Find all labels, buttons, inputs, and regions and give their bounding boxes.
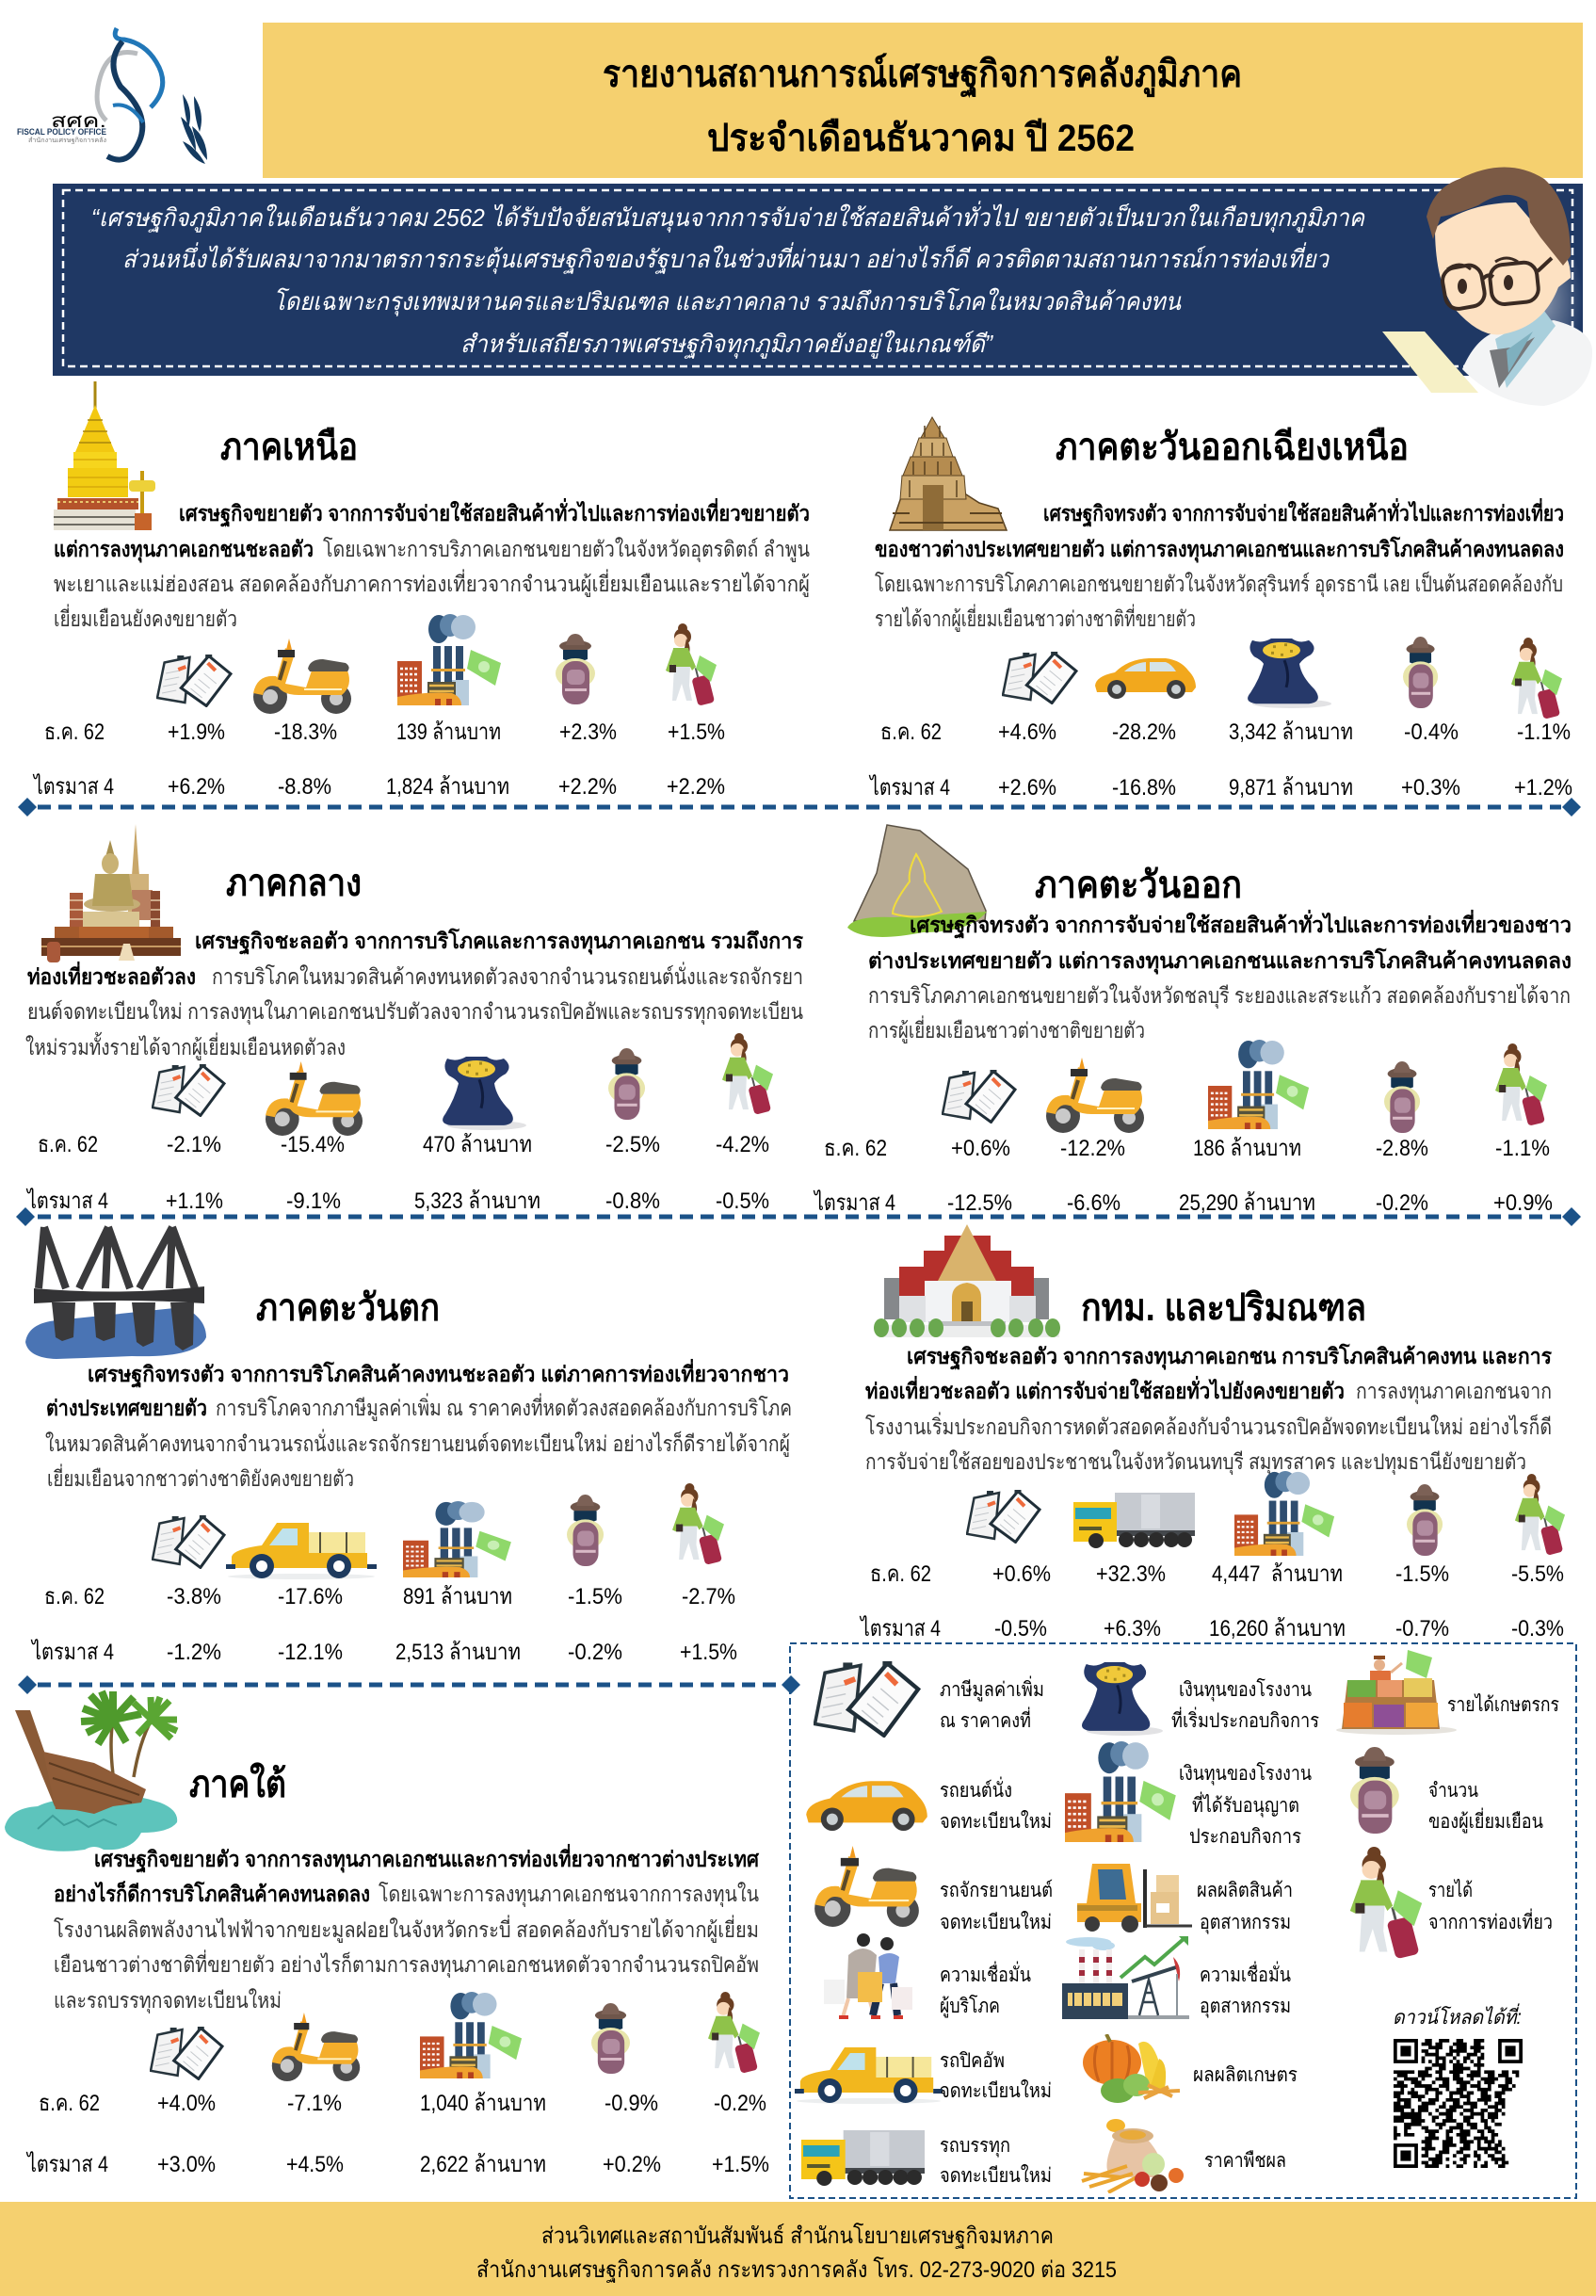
- icon: money bag: [1248, 639, 1331, 708]
- label: VAT: ณ ราคาคงที่: [940, 1706, 1031, 1732]
- data rows: [868, 720, 1572, 800]
- footer banner: [0, 2202, 1596, 2296]
- body text: การบริโภคในหมวดสินค้าคงทนหดตัวลงจากจำนวนรถยนต์นั่งและรถจักรยา: [212, 962, 803, 989]
- footer line 2: สำนักงานเศรษฐกิจการคลัง กระทรวงการคลัง โทร. 02-273-9020 ต่อ 3215: [476, 2256, 1117, 2283]
- data rows: -1.5%: [568, 1584, 622, 1609]
- label: starting factory capital: ที่เริ่มประกอบกิจการ: [1171, 1706, 1319, 1732]
- icon: truck: [801, 2130, 925, 2186]
- illustration: golden stupa: [54, 381, 155, 530]
- icon: traveler: [722, 1033, 773, 1115]
- label: industrial output: [1197, 1880, 1293, 1934]
- icon: motorcycle: [272, 2013, 360, 2081]
- data rows: -0.9%: [605, 2091, 658, 2116]
- body text: เยือนชาวต่างชาติที่ขยายตัว อย่างไรก็ตามการลงทุนภาคเอกชนหดตัวจากจำนวนรถปิคอัพ: [54, 1949, 759, 1978]
- data rows: ไตรมาส 4: [25, 1188, 108, 1214]
- data rows: 1,040 ล้านบาท: [420, 2091, 546, 2116]
- icon: traveler: [672, 1483, 724, 1565]
- body text: เศรษฐกิจชะลอตัว จากการลงทุนภาคเอกชน การบริโภคสินค้าคงทน และการ: [907, 1343, 1553, 1370]
- quote text: โดยเฉพาะกรุงเทพมหานครและปริมณฑล และภาคกลาง รวมถึงการบริโภคในหมวดสินค้าคงทน: [273, 287, 1182, 316]
- icon: backpacker: [1407, 1484, 1443, 1556]
- title banner: [263, 23, 1583, 178]
- quote text: [91, 201, 1366, 359]
- body text: เศรษฐกิจขยายตัว จากการลงทุนภาคเอกชนและการท่องเที่ยวจากชาวต่างประเทศ: [94, 1843, 759, 1873]
- data rows: +2.2%: [558, 774, 617, 800]
- data rows: +6.2%: [168, 774, 225, 800]
- icon: motorcycle: [253, 639, 351, 714]
- label: farm income: รายได้เกษตรกร: [1447, 1693, 1559, 1716]
- panel: West: [25, 1227, 792, 1665]
- icon: car: [1095, 658, 1196, 699]
- data rows: +0.6%: [951, 1136, 1010, 1161]
- data rows: +3.0%: [157, 2152, 216, 2177]
- label: tourism income: จากการท่องเที่ยว: [1428, 1908, 1553, 1933]
- data rows: ธ.ค. 62: [870, 1561, 931, 1587]
- data rows: -18.3%: [274, 720, 337, 745]
- label: industrial confidence: อุตสาหกรรม: [1200, 1996, 1291, 2018]
- data rows: +1.5%: [712, 2152, 769, 2177]
- heading: ภาคกลาง: [226, 863, 362, 904]
- icon: traveler: [1511, 638, 1562, 720]
- data rows: [32, 720, 725, 800]
- data rows: 139 ล้านบาท: [396, 720, 501, 745]
- data rows: -0.2%: [714, 2091, 766, 2116]
- data rows: +2.3%: [559, 720, 617, 745]
- quote text: “เศรษฐกิจภูมิภาคในเดือนธันวาคม 2562 ได้รับปัจจัยสนับสนุนจากการจับจ่ายใช้สอยสินค้าทั่วไป ขยายตัวเป็นบวกในเกือบทุกภูมิภาค: [91, 201, 1366, 233]
- label: new pickups: [940, 2050, 1052, 2102]
- label: new motorcycles: [940, 1879, 1053, 1933]
- icon: farm produce: [1083, 2034, 1180, 2103]
- icon: factory: [1208, 1040, 1309, 1129]
- icon: VAT forms: [1003, 652, 1076, 703]
- icon: VAT forms: [153, 1515, 224, 1567]
- data rows: -0.2%: [568, 1640, 622, 1665]
- data rows: +4.6%: [998, 720, 1056, 745]
- heading: ภาคตะวันตก: [256, 1287, 440, 1329]
- body text: [868, 909, 1572, 1043]
- data rows: -2.8%: [1376, 1136, 1428, 1161]
- label: new pickups: จดทะเบียนใหม่: [940, 2079, 1052, 2102]
- body text: [54, 497, 810, 631]
- icon: money bag: [443, 1057, 526, 1130]
- panel: summary quote: [53, 184, 1583, 376]
- label: farm output: ผลผลิตเกษตร: [1193, 2064, 1298, 2086]
- data rows: -9.1%: [286, 1188, 341, 1214]
- icon: industry and oil pump: [1062, 1936, 1189, 2019]
- data rows: ธ.ค. 62: [38, 1132, 98, 1157]
- label: new trucks: รถบรรทุก: [940, 2135, 1010, 2158]
- data rows: +0.6%: [992, 1561, 1051, 1587]
- heading: ภาคตะวันออก: [1035, 865, 1242, 906]
- data rows: [25, 2091, 769, 2177]
- data rows: -4.2%: [716, 1132, 769, 1157]
- label: new cars: จดทะเบียนใหม่: [940, 1810, 1052, 1833]
- data rows: ธ.ค. 62: [44, 1584, 105, 1609]
- data rows: -2.5%: [605, 1132, 660, 1157]
- label: consumer confidence: [940, 1961, 1031, 2018]
- label: consumer confidence: ความเชื่อมั่น: [940, 1961, 1031, 1986]
- label: new trucks: จดทะเบียนใหม่: [940, 2164, 1052, 2187]
- panel: Central: [25, 824, 804, 1214]
- data rows: -1.2%: [167, 1640, 221, 1665]
- data rows: +1.2%: [1514, 775, 1572, 800]
- body text: พะเยาและแม่ฮ่องสอน สอดคล้องกับภาคการท่องเที่ยวจากจำนวนผู้เยี่ยมเยือนและรายได้จากผู้: [54, 569, 810, 597]
- title line 1: รายงานสถานการณ์เศรษฐกิจการคลังภูมิภาค: [603, 53, 1242, 99]
- data rows: +1.5%: [668, 720, 725, 745]
- data rows: -3.8%: [167, 1584, 221, 1609]
- body text: [54, 1843, 759, 2013]
- data rows: 891 ล้านบาท: [403, 1584, 512, 1609]
- label: starting factory capital: [1171, 1678, 1319, 1732]
- icon: backpacker: [591, 2003, 630, 2074]
- data rows: +2.6%: [998, 775, 1056, 800]
- footer line 1: ส่วนวิเทศและสถาบันสัมพันธ์ สำนักนโยบายเศรษฐกิจมหภาค: [541, 2223, 1054, 2249]
- quote text: ส่วนหนึ่งได้รับผลมาจากมาตรการกระตุ้นเศรษฐกิจของรัฐบาลในช่วงที่ผ่านมา อย่างไรก็ดี ควรติดตามสถานการณ์การท่องเที่ยว: [122, 242, 1330, 274]
- data rows: -12.2%: [1060, 1136, 1125, 1161]
- label: licensed factory capital: [1179, 1762, 1312, 1848]
- data rows: ไตรมาส 4: [32, 773, 114, 800]
- body text: และรถบรรทุกจดทะเบียนใหม่: [54, 1988, 282, 2013]
- panel: legend: [782, 1643, 1576, 2198]
- data rows: +4.5%: [286, 2152, 344, 2177]
- data rows: +32.3%: [1096, 1561, 1166, 1587]
- data rows: ธ.ค. 62: [824, 1136, 887, 1161]
- icon: shoppers: [824, 1933, 912, 2017]
- icon: factory: [1065, 1741, 1176, 1842]
- body text: โดยเฉพาะการบริภาคเอกชนขยายตัวในจังหวัดอุตรดิตถ์ ลำพูน: [323, 537, 810, 562]
- data rows: -0.8%: [605, 1188, 660, 1214]
- data rows: 470 ล้านบาท: [423, 1132, 532, 1157]
- icon: backpacker: [1403, 637, 1438, 708]
- data rows: +0.9%: [1493, 1190, 1553, 1216]
- label: crop prices: ราคาพืชผล: [1204, 2150, 1286, 2172]
- icon: factory: [1234, 1471, 1334, 1556]
- data rows: -8.8%: [278, 774, 331, 800]
- data rows: ธ.ค. 62: [39, 2091, 100, 2116]
- label: number of visitors: จำนวน: [1428, 1780, 1478, 1802]
- body text: รายได้จากผู้เยี่ยมเยือนชาวต่างชาติที่ขยายตัว: [875, 604, 1196, 632]
- icon: traveler: [1515, 1474, 1565, 1556]
- heading: ภาคใต้: [189, 1762, 286, 1805]
- icon: traveler: [1495, 1043, 1547, 1126]
- body text: โรงงานผลิตพลังงานไฟฟ้าจากขยะมูลฝอยในจังหวัดกระบี่ สอดคล้องกับรายได้จากผู้เยี่ยม: [54, 1915, 759, 1943]
- icon: motorcycle: [1046, 1058, 1144, 1133]
- label: new cars: รถยนต์นั่ง: [940, 1776, 1012, 1802]
- panel: Northeast: [868, 417, 1572, 800]
- data rows: -12.1%: [278, 1640, 343, 1665]
- icon: backpacker: [1350, 1747, 1399, 1834]
- body text: อย่างไรก็ดีการบริโภคสินค้าคงทนลดลง: [54, 1880, 370, 1906]
- icon: VAT forms: [814, 1661, 918, 1736]
- icon: backpacker: [608, 1048, 645, 1120]
- label: industrial confidence: ความเชื่อมั่น: [1200, 1961, 1291, 1986]
- data rows: 3,342 ล้านบาท: [1229, 720, 1353, 745]
- body text: ท่องเที่ยวชะลอตัวลง: [27, 961, 196, 989]
- illustration: stone monument: [890, 417, 1007, 530]
- label: consumer confidence: ผู้บริโภค: [940, 1995, 1000, 2018]
- body text: แต่การลงทุนภาคเอกชนชะลอตัว: [54, 537, 314, 563]
- label: new trucks: [940, 2135, 1052, 2187]
- body text: ต่างประเทศขยายตัว: [46, 1396, 207, 1420]
- data rows: -0.5%: [994, 1616, 1047, 1641]
- icon: truck: [1073, 1493, 1195, 1548]
- body text: [25, 928, 804, 1060]
- heading: ภาคเหนือ: [220, 427, 358, 468]
- data rows: +0.2%: [603, 2152, 661, 2177]
- body text: [865, 1343, 1553, 1475]
- data rows: ไตรมาส 4: [25, 2151, 108, 2177]
- data rows: +2.2%: [667, 774, 725, 800]
- data rows: 9,871 ล้านบาท: [1229, 775, 1353, 800]
- data rows: +6.3%: [1104, 1616, 1161, 1641]
- data rows: -0.7%: [1395, 1616, 1449, 1641]
- data rows: -1.1%: [1495, 1136, 1550, 1161]
- icon: motorcycle: [814, 1846, 919, 1927]
- data rows: [30, 1584, 737, 1665]
- data rows: 4,447 ล้านบาท: [1212, 1561, 1343, 1587]
- label: number of visitors: [1428, 1780, 1543, 1834]
- data rows: ธ.ค. 62: [44, 720, 105, 745]
- data rows: +4.0%: [157, 2091, 216, 2116]
- data rows: -28.2%: [1112, 720, 1176, 745]
- body text: ใหม่รวมทั้งรายได้จากผู้เยี่ยมเยือนหดตัวลง: [25, 1032, 346, 1060]
- label: licensed factory capital: เงินทุนของโรงงาน: [1179, 1762, 1312, 1786]
- icon: forklift: [1077, 1864, 1192, 1932]
- data rows: -12.5%: [947, 1190, 1012, 1216]
- icon: factory: [420, 1992, 522, 2078]
- QR code: [1394, 2039, 1523, 2168]
- data rows: -1.5%: [1395, 1561, 1449, 1587]
- icon: money bag: [1082, 1662, 1163, 1736]
- icon: VAT forms: [151, 2027, 222, 2078]
- data rows: [859, 1561, 1564, 1641]
- icon: grain sack and crops: [1082, 2119, 1184, 2192]
- label: VAT: [940, 1675, 1044, 1732]
- data rows: 2,622 ล้านบาท: [420, 2152, 546, 2177]
- panel: Bangkok and vicinity: [859, 1224, 1565, 1641]
- icon: traveler: [1350, 1847, 1422, 1959]
- data rows: 25,290 ล้านบาท: [1179, 1190, 1315, 1216]
- label: new motorcycles: จดทะเบียนใหม่: [940, 1911, 1052, 1933]
- data rows: -0.2%: [1376, 1190, 1428, 1216]
- data rows: [25, 1132, 769, 1214]
- label: industrial output: ผลผลิตสินค้า: [1197, 1880, 1293, 1901]
- icon: backpacker: [556, 634, 595, 704]
- data rows: +1.5%: [680, 1640, 737, 1665]
- data rows: ไตรมาส 4: [813, 1189, 895, 1216]
- heading: กทม. และปริมณฑล: [1081, 1287, 1366, 1329]
- icon: VAT forms: [153, 1064, 224, 1115]
- illustration: rock with Buddha outline: [847, 825, 987, 937]
- data rows: -2.7%: [682, 1584, 735, 1609]
- label: tourism income: [1428, 1879, 1553, 1933]
- label: industrial confidence: [1200, 1961, 1291, 2018]
- data rows: 16,260 ล้านบาท: [1209, 1616, 1346, 1641]
- data rows: -5.5%: [1511, 1561, 1564, 1587]
- body text: ยนต์จดทะเบียนใหม่ การลงทุนในภาคเอกชนปรับตัวลงจากจำนวนรถปิคอัพและรถบรรทุกจดทะเบียน: [27, 999, 803, 1025]
- body text: ต่างประเทศขยายตัว แต่การลงทุนภาคเอกชนและการบริโภคสินค้าคงทนลดลง: [868, 947, 1572, 975]
- data rows: -2.1%: [167, 1132, 221, 1157]
- data rows: 2,513 ล้านบาท: [395, 1640, 521, 1665]
- label: number of visitors: ของผู้เยี่ยมเยือน: [1428, 1807, 1543, 1834]
- data rows: -0.5%: [716, 1188, 769, 1214]
- label: industrial output: อุตสาหกรรม: [1200, 1912, 1291, 1934]
- logo: fiscal policy office: สศค.: [51, 111, 106, 132]
- icon: factory: [403, 1501, 511, 1577]
- label: VAT: ภาษีมูลค่าเพิ่ม: [940, 1675, 1044, 1702]
- illustration: wooden bridge: [25, 1227, 206, 1359]
- data rows: ไตรมาส 4: [859, 1615, 941, 1641]
- icon: VAT forms: [157, 655, 231, 706]
- body text: การผู้เยี่ยมเยือนชาวต่างชาติขยายตัว: [868, 1015, 1145, 1043]
- quote text: สำหรับเสถียรภาพเศรษฐกิจทุกภูมิภาคยังอยู่ในเกณฑ์ดี”: [460, 330, 993, 359]
- panel: East: [813, 825, 1572, 1216]
- body text: เศรษฐกิจทรงตัว จากการจับจ่ายใช้สอยสินค้าทั่วไปและการท่องเที่ยวของชาว: [910, 909, 1572, 939]
- icon: traveler: [708, 1992, 760, 2074]
- label: download here: ดาวน์โหลดได้ที่:: [1393, 2003, 1522, 2029]
- icon: pickup truck: [226, 1523, 377, 1579]
- data rows: ไตรมาส 4: [868, 774, 950, 800]
- data rows: 1,824 ล้านบาท: [386, 774, 509, 800]
- body text: เยี่ยมเยือนยังคงขยายตัว: [54, 604, 237, 631]
- data rows: -17.6%: [278, 1584, 343, 1609]
- data rows: -1.1%: [1517, 720, 1571, 745]
- label: new cars: [940, 1776, 1052, 1833]
- data rows: -16.8%: [1112, 775, 1176, 800]
- data rows: -6.6%: [1067, 1190, 1120, 1216]
- icon: traveler: [666, 623, 717, 706]
- label: starting factory capital: เงินทุนของโรงงาน: [1179, 1678, 1312, 1702]
- illustration: longtail boat and palms: [5, 1691, 177, 1851]
- label: licensed factory capital: ที่ได้รับอนุญาต: [1192, 1791, 1299, 1818]
- illustration: marble temple: [874, 1224, 1060, 1337]
- body text: โดยเฉพาะการลงทุนภาคเอกชนจากการลงทุนใน: [379, 1882, 759, 1907]
- body text: เศรษฐกิจขยายตัว จากการจับจ่ายใช้สอยสินค้าทั่วไปและการท่องเที่ยวขยายตัว: [179, 497, 810, 527]
- logo: fiscal policy office: [17, 28, 207, 164]
- data rows: [813, 1136, 1553, 1216]
- illustration: doctor reading: [1382, 168, 1592, 406]
- data rows: -0.4%: [1404, 720, 1459, 745]
- data rows: ธ.ค. 62: [880, 720, 942, 745]
- icon: factory: [397, 614, 501, 705]
- icon: farmer market stall: [1336, 1650, 1457, 1735]
- icon: pickup truck: [795, 2047, 943, 2104]
- data rows: -0.3%: [1511, 1616, 1564, 1641]
- body text: [45, 1358, 792, 1491]
- icon: motorcycle: [266, 1061, 363, 1136]
- data rows: -15.4%: [281, 1132, 345, 1157]
- body text: การบริโภคจากภาษีมูลค่าเพิ่ม ณ ราคาคงที่หดตัวลงสอดคล้องกับการบริโภค: [216, 1393, 792, 1421]
- body text: เศรษฐกิจชะลอตัว จากการบริโภคและการลงทุนภาคเอกชน รวมถึงการ: [195, 928, 804, 955]
- data rows: ไตรมาส 4: [30, 1639, 114, 1665]
- label: tourism income: รายได้: [1428, 1879, 1473, 1901]
- icon: car: [806, 1781, 927, 1831]
- panel: South: [5, 1691, 769, 2177]
- label: new pickups: รถปิคอัพ: [940, 2050, 1005, 2072]
- logo: fiscal policy office: FISCAL POLICY OFFICE: [17, 127, 106, 137]
- body text: เยี่ยมเยือนจากชาวต่างชาติยังคงขยายตัว: [47, 1463, 354, 1491]
- illustration: seated Buddha ruins: [41, 824, 181, 962]
- data rows: +1.1%: [166, 1188, 223, 1214]
- icon: backpacker: [1384, 1061, 1420, 1133]
- icon: VAT forms: [967, 1490, 1040, 1542]
- label: licensed factory capital: ประกอบกิจการ: [1189, 1826, 1301, 1848]
- body text: การลงทุนภาคเอกชนจาก: [1356, 1379, 1552, 1404]
- logo: fiscal policy office: สำนักงานเศรษฐกิจการคลัง: [28, 137, 106, 144]
- data rows: 186 ล้านบาท: [1193, 1136, 1301, 1161]
- icon: VAT forms: [943, 1070, 1015, 1122]
- body text: ท่องเที่ยวชะลอตัว แต่การจับจ่ายใช้สอยทั่วไปยังคงขยายตัว: [865, 1375, 1345, 1403]
- data rows: 5,323 ล้านบาท: [414, 1188, 540, 1214]
- icon: backpacker: [567, 1495, 604, 1566]
- body text: ในหมวดสินค้าคงทนจากจำนวนรถนั่งและรถจักรยานยนต์จดทะเบียนใหม่ อย่างไรก็ดีรายได้จากผู้: [45, 1429, 790, 1457]
- data rows: -7.1%: [287, 2091, 342, 2116]
- title line 2: ประจำเดือนธันวาคม ปี 2562: [707, 118, 1135, 159]
- body text: [875, 497, 1564, 632]
- heading: ภาคตะวันออกเฉียงเหนือ: [1056, 427, 1409, 468]
- panel: North: [32, 381, 810, 800]
- label: new motorcycles: รถจักรยานยนต์: [940, 1879, 1053, 1901]
- body text: เศรษฐกิจทรงตัว จากการบริโภคสินค้าคงทนชะลอตัว แต่ภาคการท่องเที่ยวจากชาว: [88, 1358, 789, 1388]
- data rows: +1.9%: [168, 720, 225, 745]
- data rows: +0.3%: [1401, 775, 1460, 800]
